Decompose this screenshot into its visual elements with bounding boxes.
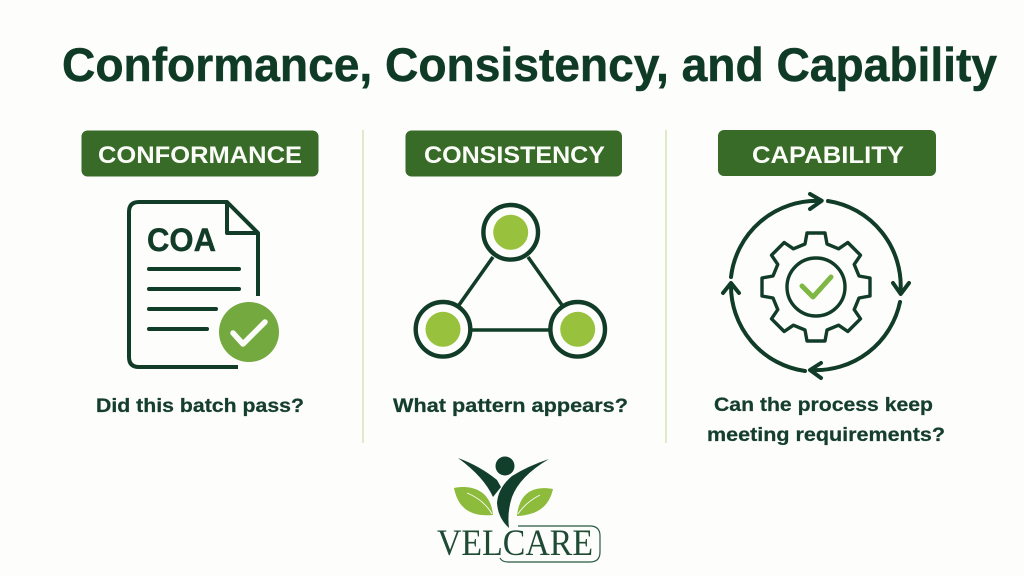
panel: conformance (82, 130, 318, 417)
question: capability (707, 394, 945, 446)
icon: gear with cycle arrows (723, 194, 909, 378)
badge: consistency (406, 130, 622, 176)
icon: COA document with check: COA (147, 222, 216, 258)
badge: conformance (82, 130, 318, 176)
panel: consistency (393, 130, 628, 417)
icon: COA document with check (129, 202, 279, 367)
logo: Velcare: VELCARE (437, 523, 593, 564)
question: conformance: Did this batch pass? (96, 395, 304, 417)
question: capability: Can the process keep (714, 394, 933, 416)
badge: capability: CAPABILITY (752, 142, 904, 169)
badge: conformance: CONFORMANCE (98, 142, 302, 169)
icon: connected triangle of nodes (416, 205, 605, 357)
badge: capability (718, 130, 936, 176)
panel: capability (707, 130, 945, 446)
question: consistency: What pattern appears? (393, 395, 628, 417)
title: Conformance, Consistency, and Capability (62, 38, 997, 91)
question: capability: meeting requirements? (707, 424, 945, 446)
logo: Velcare (437, 456, 600, 564)
badge: consistency: CONSISTENCY (424, 142, 605, 169)
